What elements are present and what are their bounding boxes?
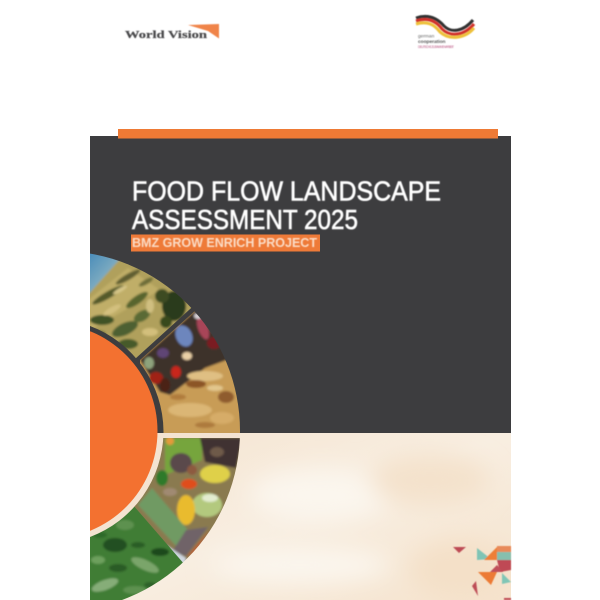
subtitle label: BMZ GROW ENRICH PROJECT [132, 236, 317, 250]
accent bar [118, 129, 498, 138]
photo: woman with vegetables [134, 438, 240, 566]
orange circle [90, 326, 164, 537]
panel: cream lower background [90, 433, 511, 600]
panel: dark cover block [90, 136, 511, 433]
decorative triangles [453, 546, 511, 600]
photo: people in grain field [140, 312, 240, 433]
logo: German Cooperation: cooperation [418, 39, 446, 45]
title [132, 176, 441, 235]
photo: landscape [90, 254, 240, 600]
logo: World Vision [125, 24, 219, 41]
logo: German Cooperation: DEUTSCHE ZUSAMMENARBEIT [418, 45, 454, 49]
logo: German Cooperation [416, 16, 474, 49]
logo: German Cooperation: german [418, 34, 435, 40]
title: FOOD FLOW LANDSCAPE [132, 176, 441, 206]
cream ring behind lower photos [90, 433, 246, 600]
title: ASSESSMENT 2025 [132, 204, 358, 235]
logo: World Vision: World Vision [125, 30, 207, 41]
photo: green leaves [90, 506, 183, 600]
